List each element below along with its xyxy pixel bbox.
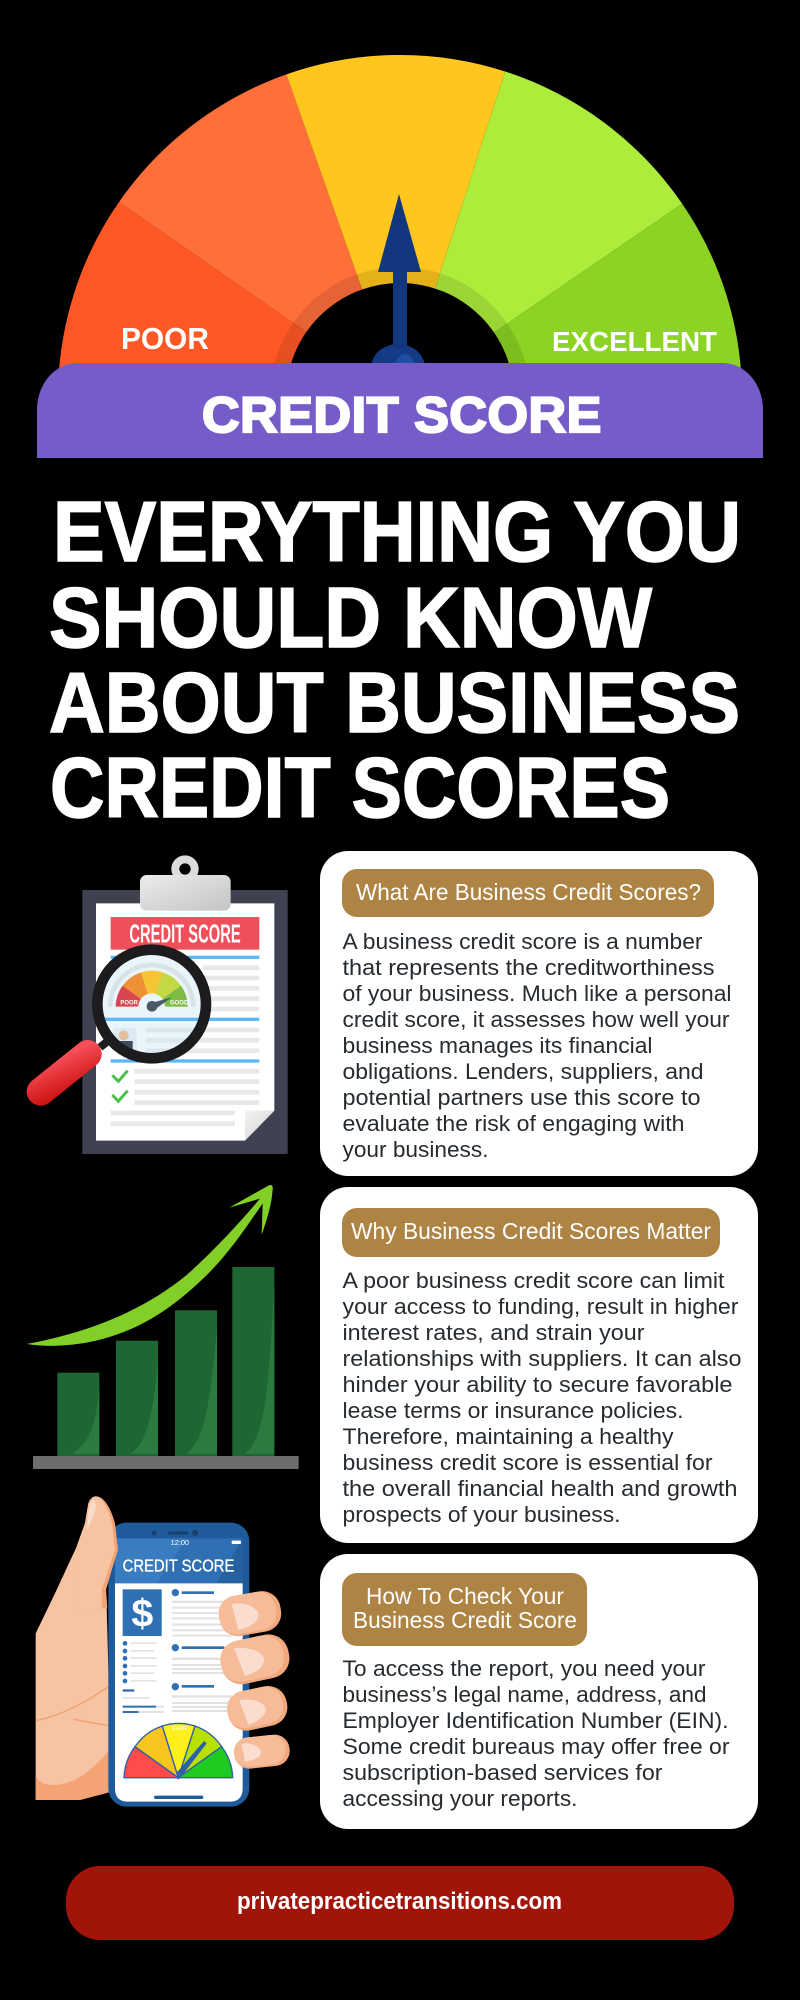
body text [342, 929, 732, 1162]
body text: obligations. Lenders, suppliers, and [342, 1059, 704, 1084]
finger 3 [224, 1683, 291, 1734]
icon: gauge needle [371, 194, 425, 392]
body text: To access the report, you need your [342, 1656, 706, 1681]
phone: 12:00 [171, 1538, 189, 1547]
gauge: credit score dial [58, 55, 742, 519]
body text: interest rates, and strain your [342, 1320, 644, 1345]
phone [108, 1523, 249, 1807]
title [49, 485, 741, 836]
palm [36, 1503, 112, 1800]
footer: website: privatepracticetransitions.com [237, 1888, 562, 1915]
gauge segment: good [400, 72, 682, 397]
icon: rising bar chart with arrow [27, 1185, 299, 1469]
gauge segment: poor [58, 202, 400, 397]
body text: A business credit score is a number [342, 929, 702, 954]
body text: Employer Identification Number (EIN). [342, 1708, 728, 1733]
finger 1 [216, 1588, 284, 1639]
heading pill [342, 1573, 587, 1646]
body text: of your business. Much like a personal [342, 981, 732, 1006]
gauge segment: fair [286, 55, 505, 397]
heading pill: How To Check Your [366, 1583, 564, 1609]
body text: relationships with suppliers. It can also [342, 1346, 742, 1371]
gauge label: poor: POOR [121, 321, 209, 356]
bar 1 [57, 1373, 99, 1456]
panel: why business credit scores matter [320, 1187, 758, 1543]
panel: what are business credit scores [320, 851, 758, 1176]
body text: subscription-based services for [342, 1760, 662, 1785]
arrow [27, 1185, 273, 1346]
body text: your access to funding, result in higher [342, 1294, 738, 1319]
heading pill [342, 869, 714, 917]
gauge segment: below average [119, 74, 400, 397]
body text: business’s legal name, address, and [342, 1682, 706, 1707]
icon: clipboard with credit score report and magnifier: CREDIT SCORE [129, 919, 241, 949]
body text: evaluate the risk of engaging with [342, 1111, 684, 1136]
body text: Some credit bureaus may offer free or [342, 1734, 730, 1759]
phone: CREDIT SCORE [123, 1555, 234, 1575]
chart base [33, 1456, 299, 1469]
phone: FAIR [173, 1726, 188, 1733]
icon: clipboard with credit score report and magnifier: GOOD [170, 1001, 189, 1007]
title: ABOUT BUSINESS [49, 656, 740, 751]
icon: clipboard with credit score report and magnifier [41, 859, 288, 1154]
icon: hand holding phone with credit score app [36, 1496, 293, 1807]
heading pill [342, 1208, 720, 1257]
heading pill: Why Business Credit Scores Matter [351, 1218, 711, 1244]
body text: your business. [342, 1137, 488, 1162]
bar 2 [116, 1341, 158, 1456]
gauge label: excellent: EXCELLENT [552, 326, 717, 357]
banner: credit score: CREDIT SCORE [202, 387, 601, 443]
body text: Therefore, maintaining a healthy [342, 1424, 674, 1449]
panel: how to check your business credit score [320, 1554, 758, 1829]
body text: that represents the creditworthiness [342, 955, 714, 980]
gauge segment: excellent [400, 204, 742, 397]
banner: credit score [37, 363, 763, 458]
footer: website [66, 1866, 734, 1940]
body text: lease terms or insurance policies. [342, 1398, 684, 1423]
phone: $ [131, 1592, 153, 1636]
body text: accessing your reports. [342, 1786, 578, 1811]
thumb over phone [77, 1496, 118, 1608]
title: EVERYTHING YOU [53, 485, 741, 580]
body text: the overall financial health and growth [342, 1476, 738, 1501]
dial on phone [124, 1723, 233, 1778]
body text: A poor business credit score can limit [342, 1268, 724, 1293]
body text: hinder your ability to secure favorable [342, 1372, 732, 1397]
body text: potential partners use this score to [342, 1085, 700, 1110]
icon: clipboard with credit score report and magnifier: POOR [120, 1001, 139, 1007]
body text [342, 1268, 742, 1527]
heading pill: What Are Business Credit Scores? [356, 879, 701, 905]
bar 3 [175, 1310, 217, 1456]
title: SHOULD KNOW [49, 571, 653, 666]
bar 4 [232, 1267, 274, 1456]
heading pill: Business Credit Score [353, 1607, 577, 1633]
body text [342, 1656, 730, 1811]
body text: prospects of your business. [342, 1502, 620, 1527]
body text: business manages its financial [342, 1033, 652, 1058]
finger 2 [217, 1631, 293, 1688]
finger 4 [233, 1733, 291, 1770]
body text: credit score, it assesses how well your [342, 1007, 730, 1032]
title: CREDIT SCORES [50, 741, 670, 836]
body text: business credit score is essential for [342, 1450, 712, 1475]
